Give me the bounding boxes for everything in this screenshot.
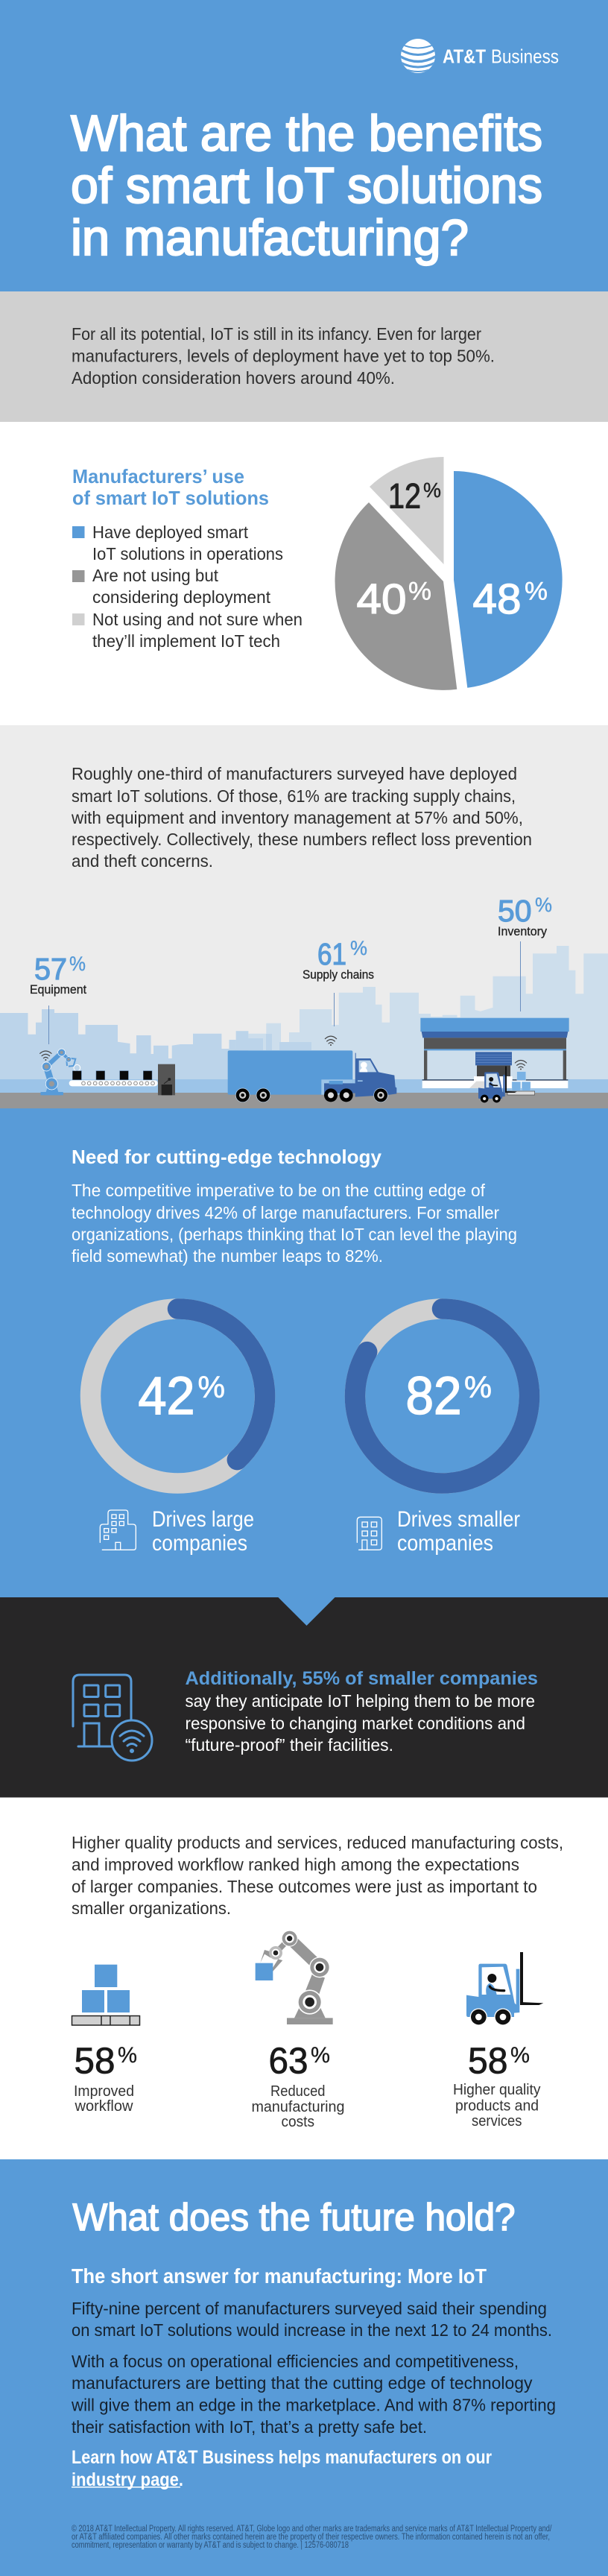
logo: AT&T Business: AT&T [443,45,486,67]
label: drives smaller companies: Drives smaller [397,1507,520,1532]
body text: field somewhat) the number leaps to 82%. [72,1246,383,1266]
body text: with equipment and inventory management at 57% and 50%, [71,808,523,827]
intro text: manufacturers, levels of deployment have yet to top 50%. [72,346,495,365]
body text: Roughly one-third of manufacturers surveyed have deployed [72,764,517,783]
stat: inventory 50%: 50 [498,894,532,928]
panel: header [0,0,608,291]
stat: supply chains 61%: % [350,937,367,959]
body text [72,1181,517,1266]
label: drives large companies [152,1507,254,1556]
donut chart: 42% [91,1309,265,1483]
donut chart: 42%: 42 [139,1367,195,1426]
body text: will give them an edge in the marketplace. And with 87% reporting [71,2396,556,2415]
stat: 58% higher quality [453,2041,541,2130]
pie chart: 40 [356,575,407,623]
call to action: industry page. [72,2469,183,2490]
stat: equipment 57%: Equipment [30,982,86,997]
stat: 58% improved workflow: 58 [75,2041,115,2081]
label: drives smaller companies: companies [397,1531,493,1556]
panel: deployment tracking [0,725,608,1108]
arrow: pointer [278,1597,335,1626]
icon: building with wifi [73,1675,152,1761]
stat: 63% reduced manufacturing costs: 63 [268,2041,308,2081]
body text: The competitive imperative to be on the cutting edge of [72,1181,486,1200]
heading: manufacturers' use: of smart IoT solutions [72,487,269,509]
stat: 58% higher quality: % [510,2043,530,2068]
body text: and theft concerns. [72,851,213,871]
panel: intro [0,291,608,422]
body text [71,2299,556,2437]
stat: 58% higher quality: products and [455,2097,539,2114]
legend: Have deployed smart [92,523,249,542]
stat: inventory 50%: Inventory [498,924,547,938]
panel: smaller companies callout [0,1597,608,1798]
legend: Are not using but [92,566,219,585]
icon: large building [100,1510,136,1550]
donut chart: 82%: % [464,1370,492,1404]
stat: 63% reduced manufacturing costs: manufacturing [252,2099,344,2115]
body text: Fifty-nine percent of manufacturers surveyed said their spending [72,2299,547,2318]
call to action: Learn how AT&T Business helps manufacturers on our [72,2447,492,2468]
heading: what does the future hold: What does the future hold? [73,2196,516,2238]
stat: 58% improved workflow [74,2041,137,2115]
label: drives large companies: Drives large [152,1507,254,1532]
legend [72,523,303,651]
stat: equipment 57% [30,952,86,1044]
callout text: say they anticipate IoT helping them to be more [185,1691,535,1711]
legend: Not using and not sure when [92,610,303,629]
stat: 58% higher quality: services [472,2113,522,2130]
logo: AT&T Business: Business [491,45,559,67]
stat: inventory 50% [498,894,552,1011]
icon: small building [357,1517,381,1550]
stat: 58% improved workflow: workflow [74,2098,133,2115]
donut chart: 82%: 82 [405,1367,462,1426]
body text: and improved workflow ranked high among the expectations [72,1854,519,1874]
body text: organizations, (perhaps thinking that IoT can level the playing [72,1225,517,1244]
callout text [185,1668,538,1755]
stat: 58% higher quality: 58 [468,2041,508,2081]
callout text: “future-proof” their facilities. [185,1735,393,1755]
stat: supply chains 61%: Supply chains [303,967,374,982]
legend: IoT solutions in operations [92,544,283,564]
body text: smaller organizations. [72,1898,231,1918]
body text: their satisfaction with IoT, that’s a pretty safe bet. [72,2417,427,2437]
pie chart: 12 [388,476,421,516]
body text [72,1833,563,1918]
body text: of larger companies. These outcomes were just as important to [72,1877,537,1896]
callout text: Additionally, 55% of smaller companies [185,1668,538,1689]
stat: 63% reduced manufacturing costs [252,2041,344,2130]
stat: 58% improved workflow: % [118,2043,137,2068]
pie chart: % [423,479,441,502]
illustration: robot arm and conveyor [40,1049,175,1095]
body text: With a focus on operational efficiencies and competitiveness, [72,2352,519,2371]
call to action [72,2447,492,2490]
pie chart: 48 [472,575,522,623]
body text: Higher quality products and services, reduced manufacturing costs, [72,1833,563,1852]
label: drives large companies: companies [152,1531,247,1556]
icon: forklift [466,1952,543,2026]
stat: equipment 57%: 57 [34,952,67,986]
legal text [72,2525,552,2550]
logo: AT&T Business [399,39,559,73]
stat: supply chains 61%: 61 [317,937,346,971]
pie chart: % [525,577,548,605]
donut chart: 82% [355,1309,530,1483]
panel: need for cutting-edge technology [0,1108,608,1597]
title [71,105,542,266]
legend: considering deployment [92,587,271,607]
icon: robot arm [256,1931,333,2024]
illustration: warehouse with forklift [420,1018,569,1102]
body text: respectively. Collectively, these numbers reflect loss prevention [72,830,532,849]
heading: Need for cutting-edge technology [72,1146,382,1168]
stat: 63% reduced manufacturing costs: % [311,2043,330,2068]
label: drives smaller companies [397,1507,520,1556]
donut chart: 42%: % [198,1370,225,1404]
intro text [72,324,495,388]
pie chart [335,457,563,690]
skyline [0,946,608,1108]
icon: boxes on pallet [72,1965,140,2025]
pie chart: % [408,577,431,605]
subheading: The short answer for manufacturing: More IoT [72,2264,487,2288]
body text: smart IoT solutions. Of those, 61% are tracking supply chains, [72,786,516,806]
body text: manufacturers are betting that the cutting edge of technology [72,2373,533,2393]
panel: manufacturers' use [0,422,608,725]
stat: equipment 57%: % [69,953,86,975]
body text: on smart IoT solutions would increase in the next 12 to 24 months. [72,2320,552,2340]
legal text: commitment, representation or warranty by AT&T and is subject to change. | 12576-080718 [72,2541,349,2550]
illustration: truck [228,1036,396,1102]
stat: 58% higher quality: Higher quality [453,2082,541,2098]
panel: future [0,2159,608,2576]
title: What are the benefits [71,105,542,162]
heading: manufacturers' use: Manufacturers’ use [72,465,244,487]
stat: 63% reduced manufacturing costs: costs [282,2114,314,2130]
intro text: Adoption consideration hovers around 40%. [72,368,395,388]
intro text: For all its potential, IoT is still in its infancy. Even for larger [72,324,481,344]
body text [71,764,532,871]
stat: supply chains 61% [303,937,374,1026]
callout text: responsive to changing market conditions and [185,1714,525,1733]
title: of smart IoT solutions [71,157,542,214]
stat: 58% improved workflow: Improved [74,2083,134,2100]
legend: they’ll implement IoT tech [92,631,280,651]
panel: expected outcomes [72,1833,563,2130]
title: in manufacturing? [71,209,469,266]
stat: 63% reduced manufacturing costs: Reduced [270,2083,325,2100]
heading: manufacturers' use [72,465,269,509]
body text: technology drives 42% of large manufacturers. For smaller [72,1203,499,1222]
stat: inventory 50%: % [535,894,552,916]
